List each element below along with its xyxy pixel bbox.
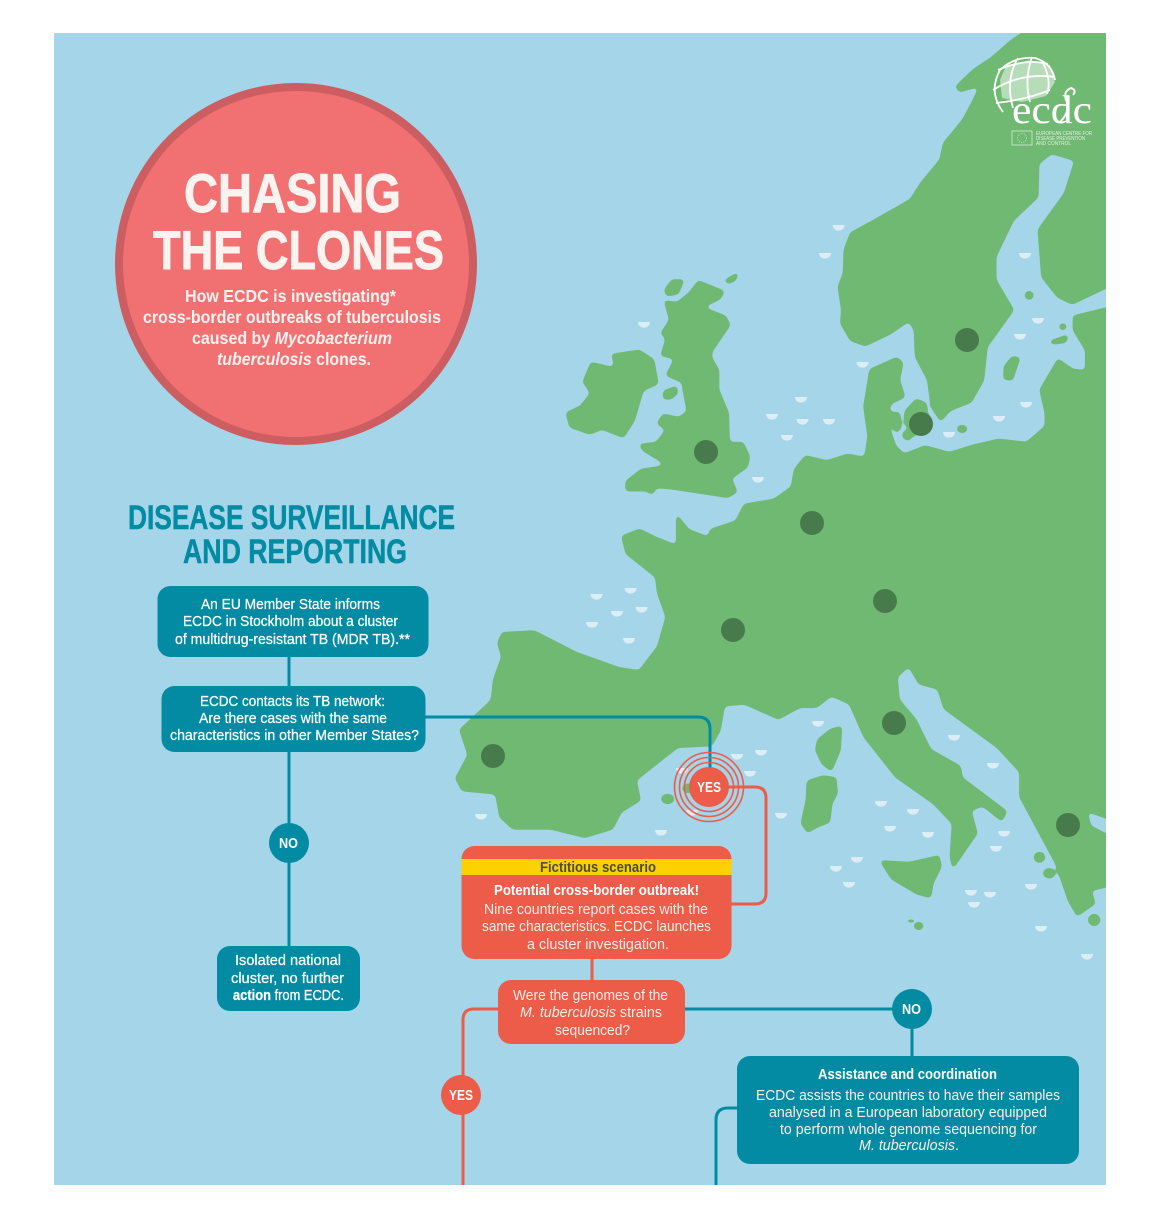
box: member state informs: of multidrug-resistant TB (MDR TB).** (175, 632, 410, 648)
box: were genomes sequenced (498, 980, 685, 1044)
agency name: EUROPEAN CENTRE FOR (1036, 131, 1092, 137)
banner: fictitious scenario: Fictitious scenario (540, 860, 656, 876)
banner: fictitious scenario (462, 859, 732, 876)
subtitle: cross-border outbreaks of tuberculosis (143, 307, 441, 327)
box: ECDC contacts network: Are there cases with the same (199, 711, 387, 727)
agency name (1036, 131, 1092, 147)
land masses (456, 0, 1132, 929)
box: assistance and coordination: ECDC assists the countries to have their samples (756, 1088, 1060, 1104)
box: ECDC contacts network: ECDC contacts its TB network: (200, 694, 385, 710)
box: member state informs: ECDC in Stockholm about a cluster (183, 614, 398, 630)
title (153, 162, 444, 281)
city markers (481, 328, 1080, 837)
agency name: AND CONTROL (1036, 141, 1071, 147)
title: CHASING (184, 162, 401, 224)
box: assistance and coordination: to perform whole genome sequencing for (780, 1122, 1037, 1138)
decision: NO (892, 989, 932, 1029)
flowchart connectors: red (463, 787, 766, 1190)
box: potential cross-border outbreak: Nine countries report cases with the (484, 902, 708, 918)
subtitle (143, 286, 441, 369)
icon: globe (993, 57, 1055, 112)
northern Europe land (567, 0, 1128, 497)
decision: YES with rings: YES (697, 780, 721, 796)
ECDC logo (993, 57, 1092, 147)
section heading (128, 499, 455, 571)
title circle (119, 87, 473, 441)
small island (908, 920, 914, 922)
box: were genomes sequenced: Were the genomes of the (513, 988, 668, 1004)
decision: NO: NO (902, 1002, 921, 1018)
box: potential cross-border outbreak: a cluster investigation. (527, 937, 669, 953)
box: isolated national cluster: cluster, no further (231, 971, 344, 987)
box: assistance and coordination (737, 1056, 1079, 1164)
box: were genomes sequenced: M. tuberculosis strains (520, 1005, 662, 1021)
box: isolated national cluster: action from ECDC. (233, 988, 344, 1004)
subtitle: caused by Mycobacterium (192, 328, 392, 348)
icon: ascender swoosh (1060, 88, 1075, 122)
box: member state informs (158, 586, 428, 657)
decision: NO (269, 823, 309, 863)
agency name: DISEASE PREVENTION (1036, 136, 1085, 142)
decision: YES: YES (449, 1088, 473, 1104)
box: potential cross-border outbreak: Potential cross-border outbreak! (494, 883, 699, 899)
icon: EU flag (1012, 131, 1032, 145)
decision: YES (441, 1075, 481, 1115)
section heading: DISEASE SURVEILLANCE (128, 499, 455, 537)
subtitle: tuberculosis clones. (217, 349, 371, 369)
box: assistance and coordination: M. tuberculosis. (859, 1138, 959, 1154)
decision: YES with rings (674, 752, 744, 822)
box: isolated national cluster (217, 946, 360, 1011)
box: ECDC contacts network: characteristics in other Member States? (170, 728, 419, 744)
title: THE CLONES (153, 219, 444, 281)
box: ECDC contacts network (162, 686, 426, 752)
subtitle: How ECDC is investigating* (185, 286, 396, 306)
box: were genomes sequenced: sequenced? (555, 1023, 630, 1039)
box: potential cross-border outbreak: same characteristics. ECDC launches (482, 919, 711, 935)
decision: NO: NO (279, 836, 298, 852)
wordmark: ecdc (1012, 87, 1092, 132)
box: assistance and coordination: Assistance and coordination (818, 1067, 997, 1083)
box: isolated national cluster: Isolated national (235, 953, 341, 969)
southern Europe land (456, 463, 1132, 929)
box: member state informs: An EU Member State informs (201, 597, 380, 613)
box: assistance and coordination: analysed in a European laboratory equipped (769, 1105, 1047, 1121)
box: potential cross-border outbreak (462, 846, 732, 959)
flowchart connectors: blue (289, 650, 912, 1190)
section heading: AND REPORTING (183, 533, 407, 571)
waves on the sea (475, 225, 1093, 960)
